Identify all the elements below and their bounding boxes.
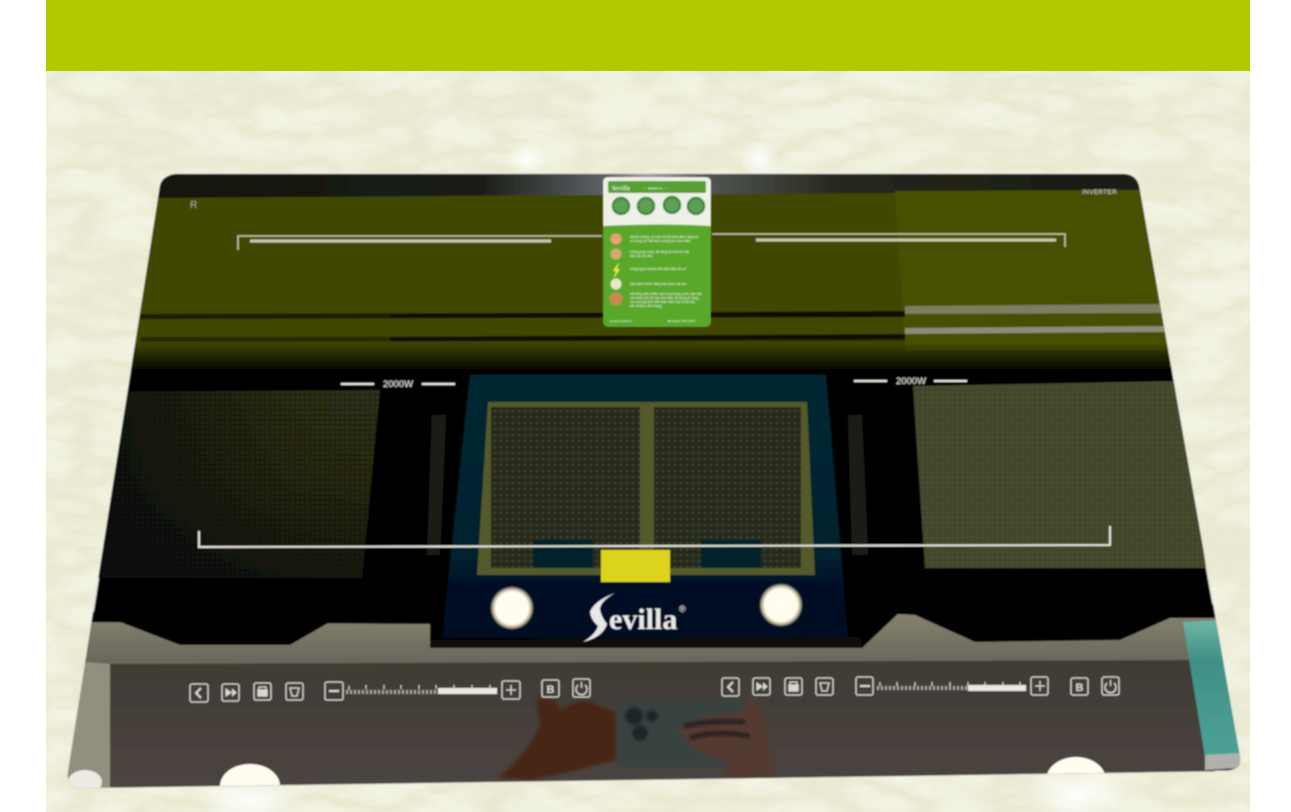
sticker body text: [630, 235, 702, 308]
Sevilla logo: evilla: [609, 603, 677, 636]
reflection: horizontal stripes: [140, 304, 1170, 342]
product sticker card: [603, 177, 711, 327]
right power slider: [877, 682, 1026, 691]
sticker footer: [610, 319, 695, 323]
sticker body text: Bảo hành chính hãng toàn quốc dài hạn: [630, 282, 687, 286]
left power slider: [346, 685, 497, 694]
reflection: dark upper bar: [60, 369, 1240, 393]
reflection: beige band below black: [60, 604, 1240, 664]
yellow hologram sticker: [601, 550, 670, 582]
sticker footer: ■ Hotline 1900 0000: [668, 319, 695, 323]
sticker body text: Công nghệ Inverter tiết kiệm điện tối ưu: [630, 267, 686, 271]
sticker top icons: [613, 197, 704, 214]
sticker header bar: ···· ●●●● ▪▪▪ ····: [642, 186, 668, 190]
sticker body text: bền bỉ theo năm tháng: [630, 304, 662, 308]
sticker header bar: [608, 181, 706, 193]
sticker footer: ● www.sevilla.vn: [610, 319, 632, 323]
reflection: olive wall: [132, 174, 1172, 370]
reflection: lights at base of glass: [218, 762, 281, 787]
reflection: right grey mesh panel: [913, 381, 1206, 568]
icon: left lock key: [254, 683, 271, 700]
sticker body text: sử dụng với mặt kính cường lực chịu nhiệt: [630, 239, 690, 243]
cooktop glass panel: [60, 174, 1240, 808]
Sevilla logo: [583, 593, 686, 642]
mark: inverter: INVERTER: [1082, 189, 1117, 196]
sticker body text: bếp sau khi nấu: [630, 254, 653, 258]
label: right 2000W: 2000W: [896, 376, 926, 387]
icon: left boost key: [542, 680, 559, 697]
sticker header bar: Sevilla: [612, 185, 630, 192]
hood lamp right: [759, 583, 803, 627]
sticker body text: Nhanh chóng, an toàn và tiết kiệm điện năng khi: [630, 235, 699, 239]
reflection: left dark mesh panel: [88, 390, 380, 578]
sticker body text: cho mọi gia đình Việt Nam hiện nay và lâu dài: [630, 300, 695, 304]
reflection: fade to dark above hood: [131, 345, 1172, 372]
mark: top-left R: R: [190, 200, 197, 211]
label: left 2000W: 2000W: [383, 379, 413, 390]
icon: right pot key: [816, 678, 833, 695]
reflection: phone and hands: [498, 696, 778, 780]
icon: right power key: [1102, 677, 1119, 695]
reflection: side mesh strips: [848, 415, 868, 555]
reflection: range hood centre: [430, 373, 862, 648]
icon: right plus key: [1031, 677, 1048, 695]
icon: right back key: [722, 678, 739, 696]
sticker list icons: [610, 234, 622, 306]
icon: left boost key: B: [547, 684, 555, 696]
cooking zone line: upper right bracket: [712, 234, 1065, 247]
reflection: lower grey panel: [110, 660, 1215, 788]
icon: right minus key: [856, 677, 873, 695]
label: left 2000W: [341, 379, 455, 390]
control panel: right: [722, 677, 1119, 696]
icon: left minus key: [325, 682, 343, 700]
cooking zone line: lower wide bracket: [199, 526, 1110, 547]
icon: right boost key: B: [1076, 682, 1084, 694]
label: right 2000W: [854, 376, 967, 387]
icon: right boost key: [1071, 678, 1088, 695]
icon: left plus key: [502, 681, 520, 699]
icon: right skip key: [753, 678, 770, 695]
hood lamp left: [490, 586, 534, 630]
sticker body text: Hệ thống điều khiển cảm ứng thông minh, hiện đại: [630, 292, 702, 296]
icon: left skip key: [222, 684, 239, 701]
icon: left back key: [190, 684, 208, 702]
reflection: dark top strip with sheen: [150, 174, 1145, 198]
control panel: left: [190, 679, 590, 702]
icon: right lock key: [785, 678, 802, 695]
lime green wall: [46, 0, 1250, 71]
reflection: upper right pale window: [895, 190, 1168, 350]
reflection: right teal strip: [1183, 620, 1240, 757]
icon: left power key: [573, 679, 590, 697]
cooking zone line: upper left bracket: [238, 236, 602, 250]
icon: left pot key: [286, 683, 303, 700]
sticker body text: Chống trầy xước, dễ dàng vệ sinh bề mặt: [630, 249, 689, 254]
Sevilla logo: ®: [679, 604, 686, 614]
reflection: left light strip: [67, 662, 111, 788]
sticker body text: với nhiều chế độ nấu linh hoạt, dễ dàng sử dụng: [630, 295, 699, 300]
